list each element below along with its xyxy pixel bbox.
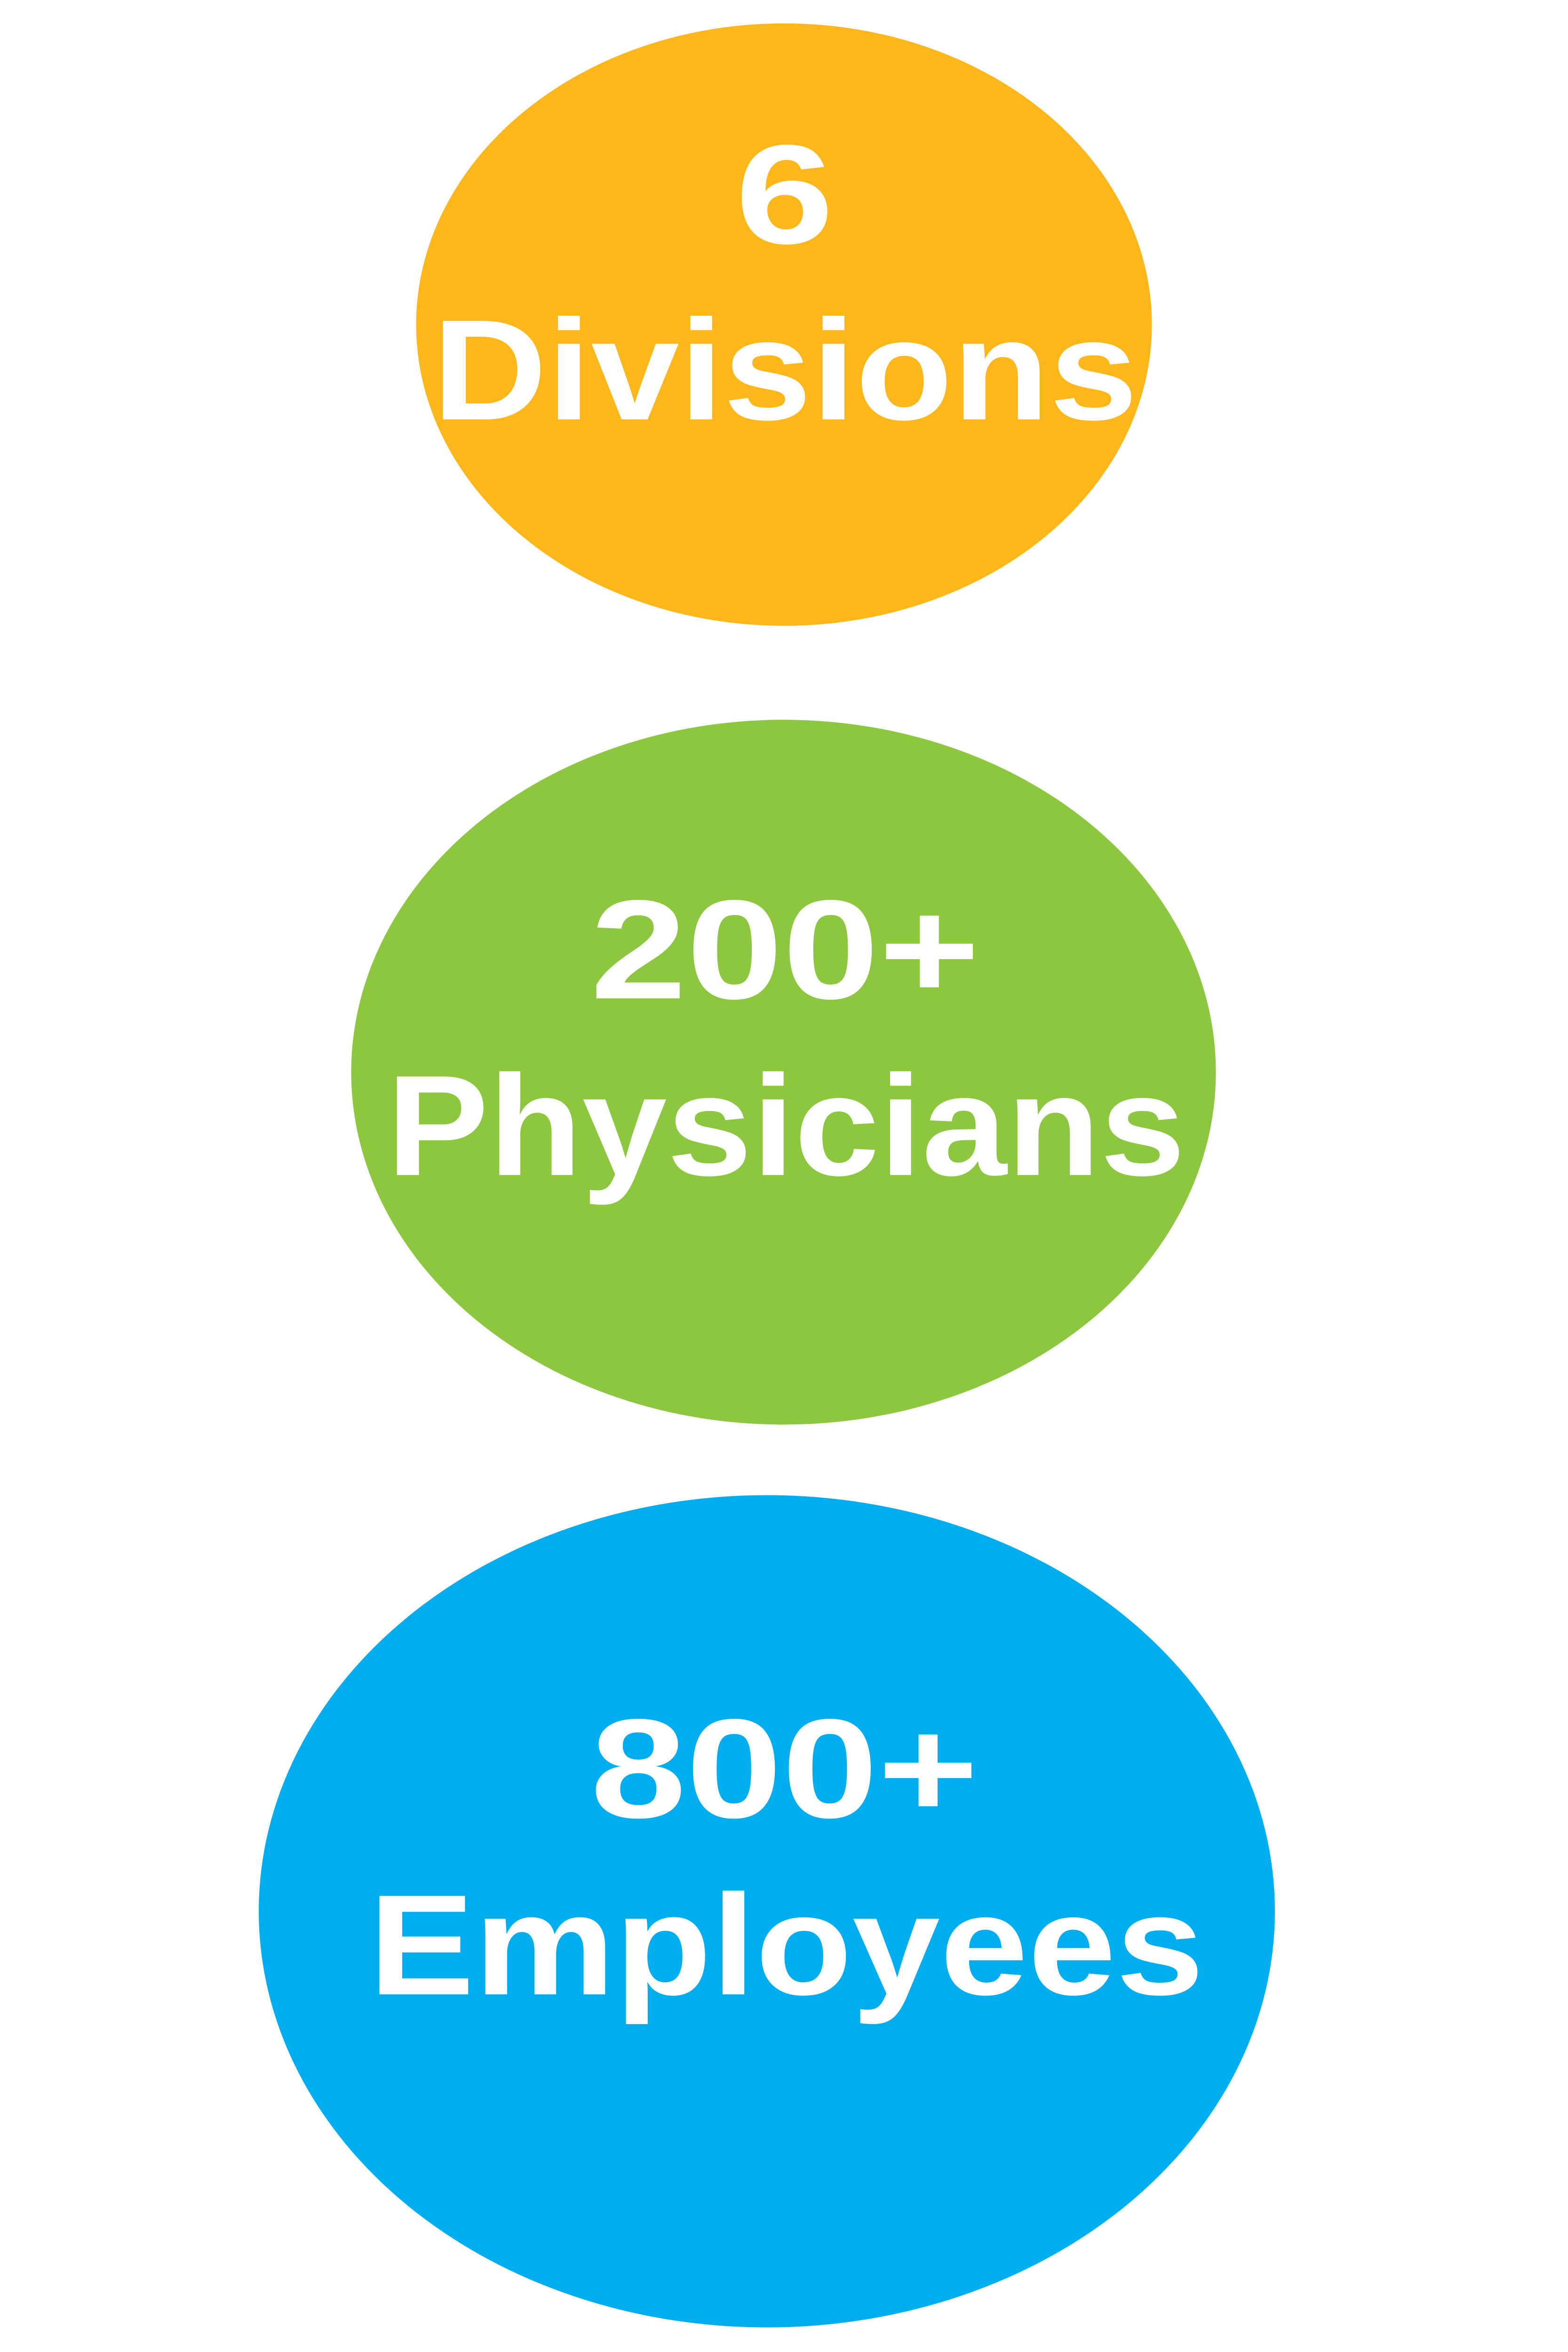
panel: divisions	[416, 24, 1152, 626]
label: Employees: Employees	[369, 1865, 1204, 2026]
blue circle	[259, 1495, 1275, 2328]
panel: physicians	[351, 720, 1216, 1424]
number: 800+: 800+	[590, 1690, 979, 1847]
number: 200+: 200+	[590, 871, 980, 1029]
panel: employees	[259, 1495, 1275, 2328]
green circle	[351, 720, 1216, 1424]
label: Physicians: Physicians	[387, 1045, 1185, 1206]
number: 6: 6	[735, 116, 834, 273]
orange circle	[416, 24, 1152, 626]
label: Divisions: Divisions	[432, 290, 1138, 450]
